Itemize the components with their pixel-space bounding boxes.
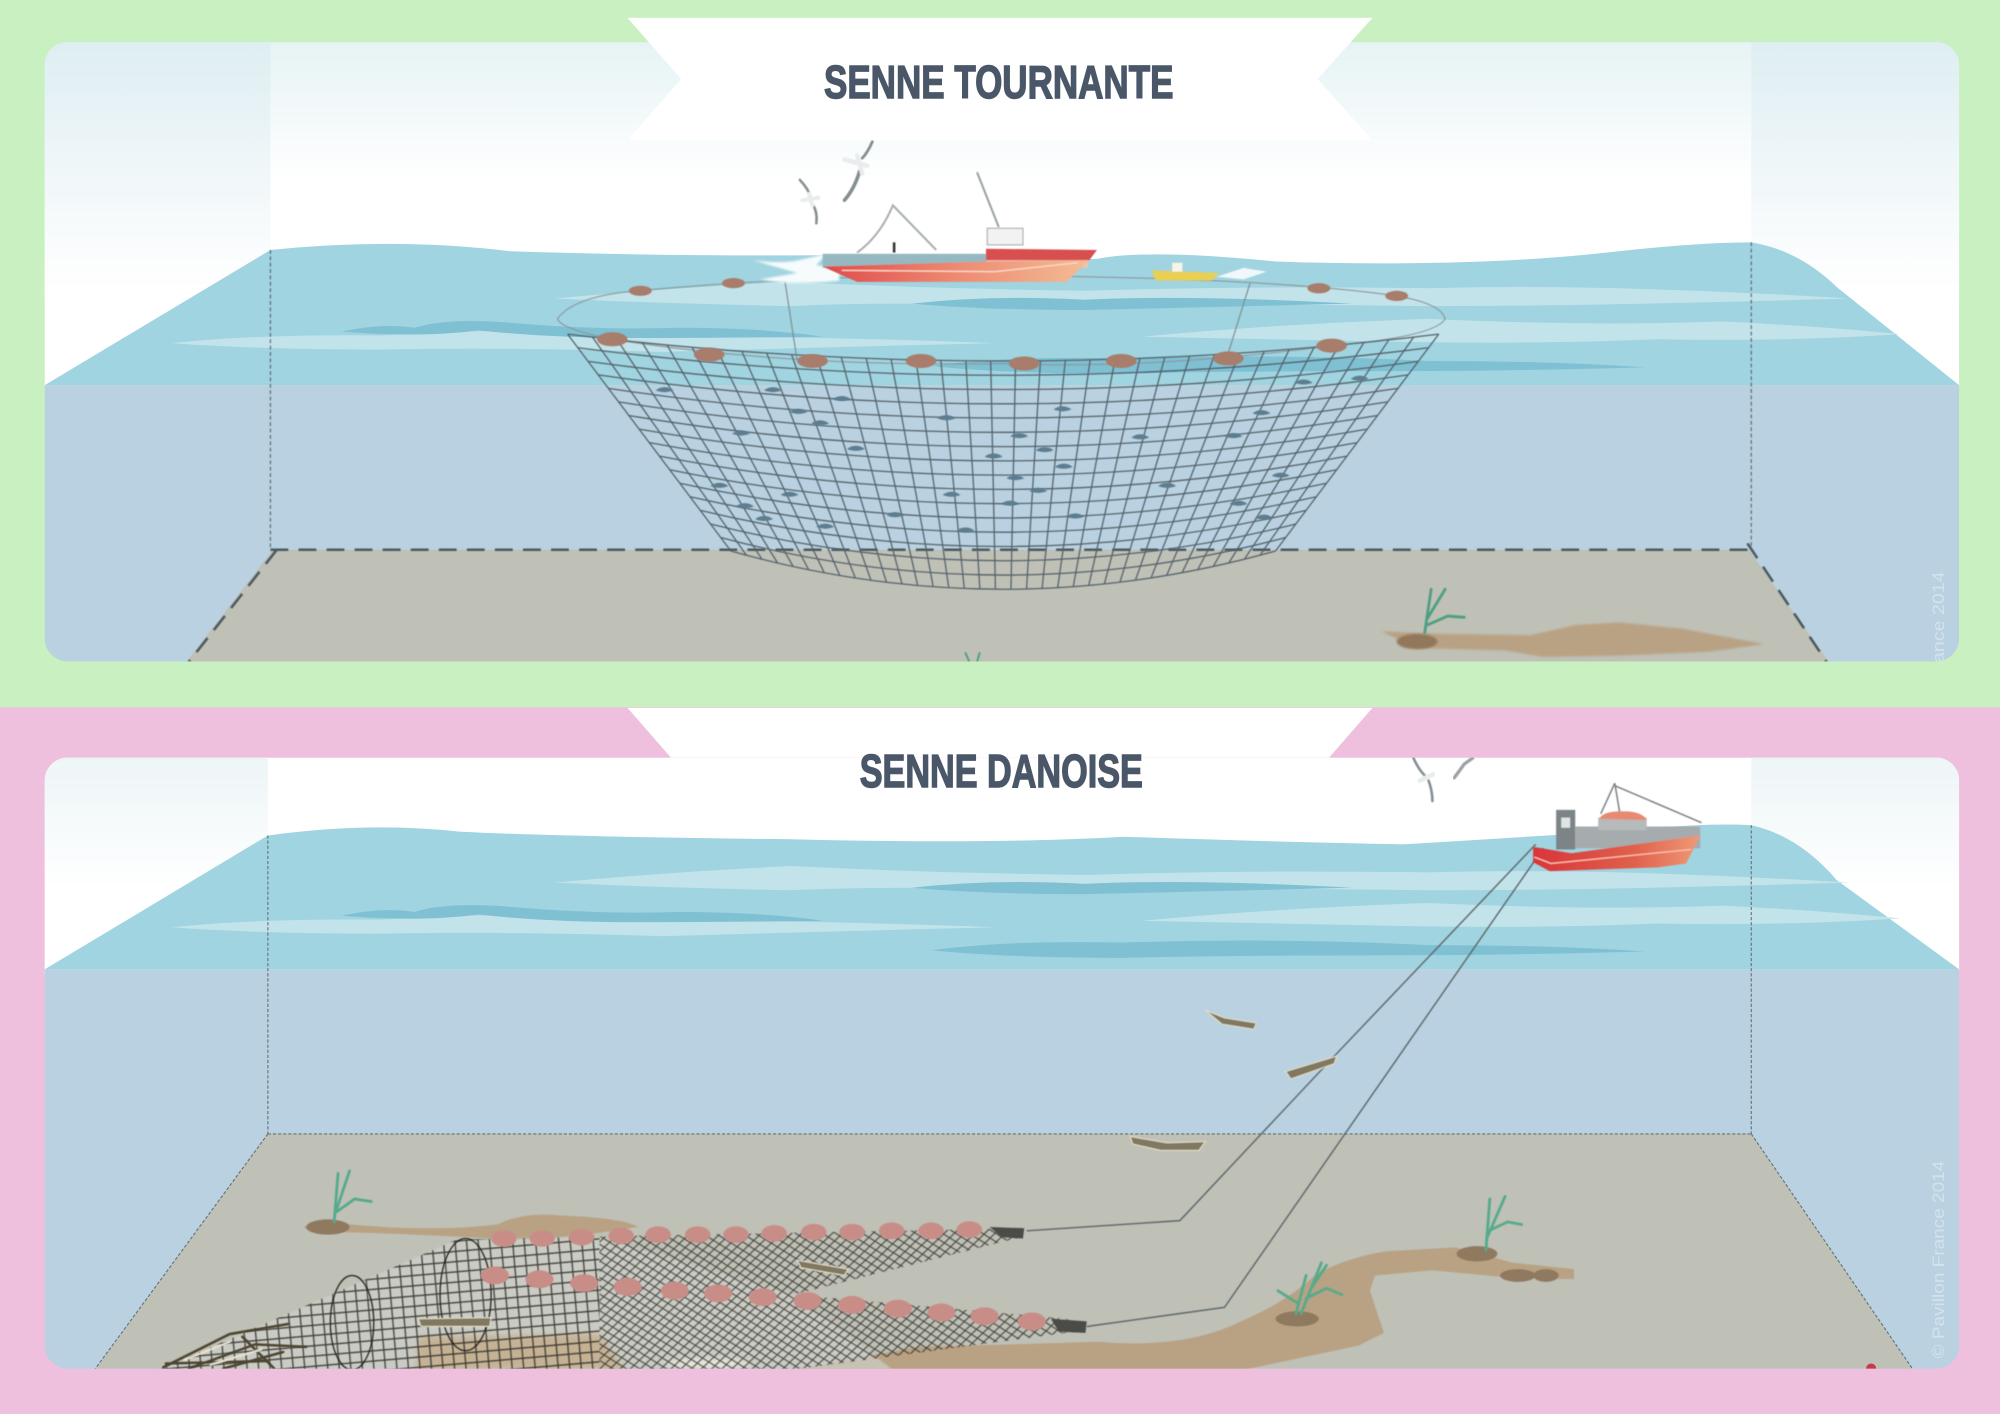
hull [823, 260, 1089, 282]
title: SENNE TOURNANTE [824, 56, 1173, 108]
sand patch [1381, 622, 1764, 657]
net parallel lines [568, 334, 1439, 589]
net meridian lines [568, 334, 1439, 589]
hull [1533, 835, 1700, 871]
net top rim [557, 275, 1445, 365]
seaweed [966, 589, 1464, 662]
wave streaks [172, 282, 1900, 374]
sky [45, 758, 1959, 974]
rail [987, 228, 1023, 245]
seaweed [334, 1171, 1522, 1314]
netting wings, diamond mesh [599, 1228, 1084, 1370]
panel: senne danoise illustration [45, 758, 1959, 1374]
sand, right [791, 1247, 1574, 1370]
sand under the net [416, 1334, 625, 1370]
background: pink band [0, 707, 2000, 1414]
seabed [94, 1134, 1913, 1370]
seagull, right [844, 142, 872, 200]
net float rows [481, 1221, 1046, 1330]
seine net [557, 275, 1445, 589]
panel: senne tournante illustration [44, 42, 1960, 662]
netting body, square mesh [159, 1237, 599, 1370]
seagull wing, clipped [1454, 758, 1473, 778]
seabed [186, 550, 1829, 662]
trawler [1533, 783, 1702, 871]
title: SENNE DANOISE [860, 745, 1143, 797]
seabed outline [94, 825, 1913, 1370]
banner: senne danoise [628, 708, 1372, 797]
small yellow skiff [1152, 263, 1267, 281]
fish school [656, 376, 1369, 533]
fishing boat [823, 172, 1097, 282]
seabed outline dashes [189, 242, 1827, 662]
seagull, clipped [1413, 758, 1434, 801]
wave streaks [172, 866, 1900, 958]
sea surface [45, 825, 1959, 969]
hull upper [986, 249, 1097, 261]
superstructure [1575, 827, 1700, 848]
net tips [990, 1227, 1087, 1333]
underwater wall [45, 969, 1959, 1370]
gantry [1556, 810, 1575, 849]
copyright, clipped: © Pavillon France 2014 [1929, 571, 1948, 775]
whitish sand sweep [665, 1358, 751, 1369]
deck [823, 254, 989, 268]
boat wake [753, 254, 839, 283]
net floats [597, 278, 1408, 371]
copyright: © Pavillon France 2014 [1929, 1161, 1948, 1358]
cod-end catch [163, 1324, 306, 1369]
seagull, left [800, 180, 819, 223]
mast [977, 172, 999, 227]
deck crew [893, 242, 895, 253]
net lines to the boats [784, 278, 1250, 361]
marker [1866, 1363, 1876, 1374]
sea surface [45, 242, 1959, 385]
net body underlay [159, 1237, 893, 1370]
net hoops [330, 1238, 491, 1370]
underwater wall [45, 385, 1959, 662]
sand, left [304, 1215, 638, 1240]
crane [857, 205, 936, 253]
mast and rigging [1601, 783, 1702, 823]
sky [45, 42, 1959, 386]
otter boards and fish [418, 1010, 1337, 1327]
warp cables [1027, 844, 1543, 1327]
rocks [306, 1219, 1559, 1327]
seaweed mound [1397, 634, 1437, 649]
banner: senne tournante [628, 18, 1372, 140]
background: green band [0, 0, 2000, 707]
